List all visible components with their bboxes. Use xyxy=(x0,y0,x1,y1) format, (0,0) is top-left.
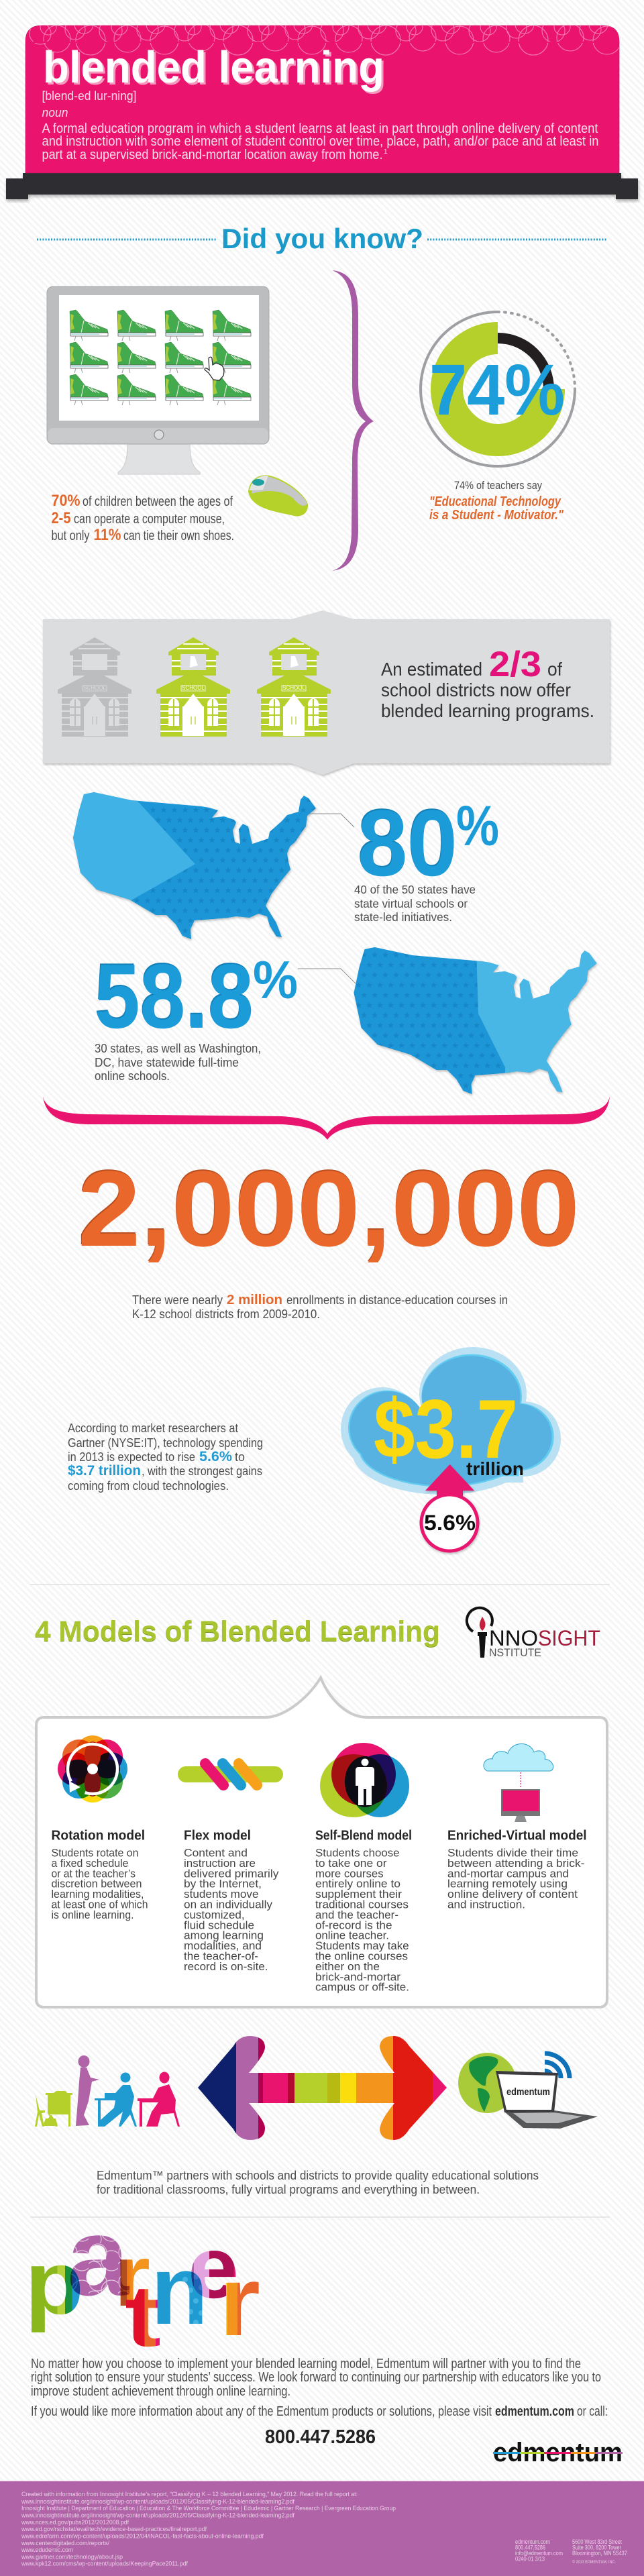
monitor screen xyxy=(59,295,259,421)
monitor body xyxy=(47,286,269,444)
title: blended learning xyxy=(45,44,386,95)
footer contact: 0240-01 3/13 xyxy=(515,2556,545,2563)
heading: partner lettering xyxy=(25,2195,260,2365)
text: Gartner spending: coming from cloud technologies. xyxy=(68,1479,229,1493)
text: 2 million enrollments: 2 million xyxy=(227,1293,282,1307)
text: 2 million enrollments xyxy=(132,1293,508,1321)
definition: and instruction with some element of student control over time, place, path, and/or pace and at least in xyxy=(42,134,598,149)
arrow and 5.6% badge xyxy=(421,1464,478,1551)
$3.7 value: $3.7 xyxy=(374,1383,518,1476)
rotation title: Rotation model xyxy=(51,1829,145,1843)
rotation description: discretion between xyxy=(51,1878,142,1890)
heading: partner lettering: p xyxy=(25,2233,84,2333)
icon: flex xyxy=(186,1764,275,1785)
icon: hand cursor xyxy=(205,357,224,380)
self-blend description: Students choose xyxy=(315,1847,400,1860)
cloud xyxy=(341,1347,561,1495)
self-blend description: brick-and-mortar xyxy=(315,1971,401,1983)
text: 2 million enrollments: K-12 school districts from 2009-2010. xyxy=(132,1307,320,1321)
stat: 58.8%: 58.8 xyxy=(94,944,253,1046)
footer address: Bloomington, MN 55437 xyxy=(572,2550,627,2557)
stat: 80%: % xyxy=(456,794,499,857)
model: rotation xyxy=(51,1735,148,1921)
header pink board xyxy=(25,25,619,173)
text: teachers quote: is a Student - Motivator." xyxy=(429,508,564,523)
text: 30 states: DC, have statewide full-time xyxy=(95,1055,239,1069)
heading: 4 Models of Blended Learning: 4 Models of Blended Learning xyxy=(35,1616,440,1648)
self-blend description xyxy=(315,1847,409,1994)
icon: computer mouse xyxy=(248,475,308,517)
model: self-blend xyxy=(315,1743,412,1994)
text: 70% of children xyxy=(51,492,234,544)
footer sources: www.innosightinstitute.org/innosight/wp-content/uploads/2012/05/Classifying-K-12-blended-learning2.pdf xyxy=(21,2512,294,2520)
text: closing paragraph: or call: xyxy=(577,2404,608,2419)
text: 70% of children: can operate a computer mouse, xyxy=(74,512,225,527)
text: Gartner spending: According to market researchers at xyxy=(68,1421,238,1435)
self-blend description: campus or off-site. xyxy=(315,1982,409,1994)
stat: 58.8%: % xyxy=(253,950,298,1010)
rotation description: a fixed schedule xyxy=(51,1858,129,1870)
self-blend description: the online courses xyxy=(315,1951,408,1963)
text: 70% of children: of children between the ages of xyxy=(83,494,233,509)
footer contact: info@edmentum.com xyxy=(515,2550,563,2557)
text: two thirds: An estimated xyxy=(381,659,482,680)
text: 70% of children: but only xyxy=(51,529,90,543)
text: 2 million enrollments: There were nearly xyxy=(132,1293,223,1307)
text: Gartner spending: in 2013 is expected to rise xyxy=(68,1450,195,1464)
definition: 1 xyxy=(384,148,388,156)
stat: 2,000,000: 2,000,000 xyxy=(78,1148,580,1269)
footer sources: www.edudemic.com xyxy=(21,2546,73,2554)
footer sources: www.nces.ed.gov/pubs2012/2012008.pdf xyxy=(21,2519,129,2526)
footer panel xyxy=(0,2481,644,2576)
stat: 58.8%: 58.8 xyxy=(95,945,254,1047)
text: 70% of children: 11% xyxy=(94,526,121,544)
icon: cloud and screen xyxy=(484,1743,553,1822)
flex description: Content and xyxy=(184,1847,248,1860)
header panel: blended learning definition xyxy=(6,15,638,199)
definition xyxy=(42,121,598,162)
footer address: Suite 300, 8200 Tower xyxy=(572,2544,622,2552)
text: 30 states: online schools. xyxy=(95,1069,170,1083)
connector line xyxy=(310,814,354,827)
flex description: on an individually xyxy=(184,1898,273,1911)
text: teachers quote: "Educational Technology xyxy=(429,494,561,509)
title: blended learning xyxy=(43,42,384,93)
footer sources: www.centerdigitaled.com/reports/ xyxy=(21,2540,109,2547)
stat: 2,000,000: 2,000,000 xyxy=(77,1147,580,1267)
text: Gartner spending: Gartner (NYSE:IT), technology spending xyxy=(68,1436,263,1450)
stat: 80%: 80 xyxy=(358,790,458,896)
icon: cloud with $3.7 trillion xyxy=(341,1347,561,1551)
text: 40 of 50 states xyxy=(354,883,476,924)
flex description: instruction are xyxy=(184,1858,256,1870)
footer address: 5600 West 83rd Street xyxy=(572,2538,622,2546)
heading: 4 Models of Blended Learning: 4 Models of Blended Learning xyxy=(35,1615,440,1648)
pink brace xyxy=(43,1096,610,1140)
flex description: modalities, and xyxy=(184,1940,262,1952)
text: 70% of children: can tie their own shoes. xyxy=(123,529,234,543)
map: 58.8% of states xyxy=(354,940,602,1101)
footer sources: www.edreform.com/wp-content/uploads/2012/04/iNACOL-fast-facts-about-online-learning.pdf xyxy=(21,2533,264,2540)
icon: globe and laptop xyxy=(458,2053,598,2129)
model: enriched-virtual xyxy=(447,1743,587,1911)
enriched-virtual description: online delivery of content xyxy=(447,1888,578,1900)
footer sources: www.gartner.com/technology/about.jsp xyxy=(21,2553,123,2561)
green segment xyxy=(431,322,565,456)
logo: Innosight Institute xyxy=(467,1608,600,1659)
text: two thirds: blended learning programs. xyxy=(381,700,594,721)
self-blend description: traditional courses xyxy=(315,1898,409,1911)
text: closing paragraph: improve student achievement through online learning. xyxy=(31,2384,290,2399)
footer sources: Created with information from Innosight Institute’s report, “Classifying K – 12 blended Learning,” May 2012. Read the full report at: xyxy=(21,2491,358,2498)
enriched-virtual description: Students divide their time xyxy=(447,1847,578,1860)
text: two thirds xyxy=(381,645,594,721)
self-blend description: and the teacher- xyxy=(315,1909,398,1921)
text: Edmentum partners xyxy=(97,2169,539,2196)
icon: green school 2: SCHOOL xyxy=(282,685,305,691)
self-blend description: to take one or xyxy=(315,1858,387,1870)
text: 40 of 50 states: 40 of the 50 states have xyxy=(354,883,476,896)
text: closing paragraph: If you would like more information about any of the Edmentum products or solutions, please visit xyxy=(31,2404,492,2419)
flex title: Flex model xyxy=(184,1829,251,1843)
text: closing paragraph xyxy=(31,2357,608,2419)
rotation description: at least one of which xyxy=(51,1898,148,1911)
self-blend description: Students may take xyxy=(315,1940,409,1952)
flex description: fluid schedule xyxy=(184,1919,254,1931)
trillion label: trillion xyxy=(466,1458,524,1479)
text: 30 states: 30 states, as well as Washington, xyxy=(95,1041,261,1055)
icon: green school 1 xyxy=(156,637,230,737)
header scribble pattern xyxy=(25,25,619,55)
self-blend description: supplement their xyxy=(315,1888,402,1900)
purple brace xyxy=(332,270,374,571)
icon: computer monitor with shoes xyxy=(47,286,269,474)
heading: partner lettering: n xyxy=(151,2235,208,2345)
header dark shelf xyxy=(6,173,638,199)
phone number: 800.447.5286 xyxy=(265,2426,376,2448)
enriched-virtual description: and-mortar campus and xyxy=(447,1868,569,1880)
icon: wifi xyxy=(545,2053,570,2078)
part of speech: noun xyxy=(42,106,68,119)
stat: 80%: 80 xyxy=(357,789,457,894)
blue student xyxy=(95,2073,137,2127)
self-blend description: of-record is the xyxy=(315,1919,392,1931)
logo: edmentum: edmentum xyxy=(493,2438,623,2467)
enriched-virtual description xyxy=(447,1847,585,1911)
text: teachers quote xyxy=(429,479,564,523)
text: two thirds: 2/3 xyxy=(489,645,541,684)
self-blend description: entirely online to xyxy=(315,1878,400,1890)
text: 40 of 50 states: state virtual schools or xyxy=(354,897,468,910)
heading: partner lettering: t xyxy=(125,2267,161,2365)
self-blend description: online teacher. xyxy=(315,1930,389,1942)
chart: 74% donut xyxy=(421,312,575,466)
heading: partner lettering: e xyxy=(188,2218,239,2316)
model: flex xyxy=(184,1764,279,1973)
rotation description: or at the teacher’s xyxy=(51,1868,136,1880)
text: Gartner spending: 5.6% xyxy=(199,1449,232,1464)
flex description: delivered primarily xyxy=(184,1868,279,1880)
flex description xyxy=(184,1847,279,1973)
text: Gartner spending: , with the strongest gains xyxy=(142,1464,262,1478)
shoes grid xyxy=(70,310,251,405)
text: 70% of children: 70% xyxy=(51,492,80,510)
logo: Innosight Institute: NNO xyxy=(489,1626,538,1650)
arrow: two-headed striped xyxy=(198,2033,447,2143)
text: 70% of children: 2-5 xyxy=(51,509,71,527)
text: Edmentum partners: for traditional classrooms, fully virtual programs and everything in between. xyxy=(97,2183,480,2196)
text: 30 states xyxy=(95,1041,261,1083)
rotation description xyxy=(51,1847,148,1921)
heading: partner lettering: r xyxy=(114,2226,150,2324)
footer contact: 800.447.5286 xyxy=(515,2544,545,2552)
flex description: by the Internet, xyxy=(184,1878,262,1890)
flex description: students move xyxy=(184,1888,259,1900)
footer contact: edmentum.com xyxy=(515,2538,550,2546)
monitor stand xyxy=(118,444,200,474)
heading: Did you know?: Did you know? xyxy=(221,223,423,254)
laptop xyxy=(496,2071,598,2129)
rotation description: Students rotate on xyxy=(51,1847,138,1860)
black segment xyxy=(498,333,554,389)
icon: rotation xyxy=(58,1735,127,1803)
self-blend description: more courses xyxy=(315,1868,384,1880)
rotation description: is online learning. xyxy=(51,1909,134,1921)
icon: self-blend xyxy=(320,1743,409,1817)
enriched-virtual title: Enriched-Virtual model xyxy=(447,1829,587,1843)
laptop: edmentum xyxy=(506,2087,550,2098)
text: Gartner spending: $3.7 trillion xyxy=(68,1463,141,1479)
flex description: the teacher-of- xyxy=(184,1951,258,1963)
heading: partner lettering: a xyxy=(67,2195,129,2318)
footer sources: www.kpk12.com/cms/wp-content/uploads/KeepingPace2011.pdf xyxy=(21,2560,188,2568)
arrow and 5.6% badge: 5.6% xyxy=(424,1511,476,1535)
text: Gartner spending xyxy=(68,1421,263,1493)
outer ring xyxy=(421,312,575,466)
enriched-virtual description: learning remotely using xyxy=(447,1878,568,1890)
footer sources: Innosight Institute | Department of Education | Education & The Workforce Committee | Edudemic | Gartner Research | Evergreen Education Group xyxy=(21,2505,396,2512)
icon: classroom silhouettes xyxy=(35,2055,180,2127)
connector line xyxy=(298,969,356,983)
footer contact xyxy=(515,2538,563,2563)
definition: A formal education program in which a student learns at least in part through online delivery of content xyxy=(42,121,598,136)
panel: school districts xyxy=(43,610,610,775)
text: 40 of 50 states: state-led initiatives. xyxy=(354,910,452,924)
definition: part at a supervised brick-and-mortar location away from home. xyxy=(42,148,382,162)
text: 2 million enrollments: enrollments in distance-education courses in xyxy=(286,1293,508,1307)
flex description: among learning xyxy=(184,1930,264,1942)
green desk and chair xyxy=(35,2091,72,2127)
text: two thirds: school districts now offer xyxy=(381,680,571,700)
footer address: © 2013 EDMENTUM, INC. xyxy=(572,2560,616,2565)
flex description: record is on-site. xyxy=(184,1961,268,1973)
logo: Innosight Institute: NSTITUTE xyxy=(489,1646,541,1659)
pronunciation: [blend-ed lur-ning] xyxy=(42,89,137,103)
panel: four models xyxy=(36,1678,607,2007)
purple teacher xyxy=(76,2055,99,2126)
enriched-virtual description: between attending a brick- xyxy=(447,1858,585,1870)
icon: green school 2 xyxy=(257,637,331,737)
icon: green school 1: SCHOOL xyxy=(182,685,205,691)
icon: gray school: SCHOOL xyxy=(83,685,106,691)
enriched-virtual description: and instruction. xyxy=(447,1898,525,1911)
74% value: 74% xyxy=(429,349,565,430)
map: 80% of states xyxy=(67,785,316,939)
self-blend title: Self-Blend model xyxy=(315,1829,412,1843)
text: closing paragraph: edmentum.com xyxy=(495,2404,574,2419)
rotation description: learning modalities, xyxy=(51,1888,144,1900)
self-blend description: either on the xyxy=(315,1961,380,1973)
icon: gray school xyxy=(58,637,131,737)
pink student xyxy=(138,2072,180,2127)
text: teachers quote: 74% of teachers say xyxy=(454,479,542,492)
footer sources: www.innosightinstitute.org/innosight/wp-content/uploads/2012/05/Classifying-K-12-blended-learning2.pdf xyxy=(21,2498,294,2506)
text: two thirds: of xyxy=(547,659,562,680)
logo: Innosight Institute: SIGHT xyxy=(538,1626,600,1650)
footer address xyxy=(572,2538,627,2565)
footer sources: www.ed.gov/rschstat/eval/tech/evidence-based-practices/finalreport.pdf xyxy=(21,2526,207,2533)
heading: partner lettering: r xyxy=(219,2246,260,2357)
text: Edmentum partners: Edmentum™ partners with schools and districts to provide quality educational solutions xyxy=(97,2169,539,2182)
footer sources xyxy=(21,2491,396,2568)
flex description: customized, xyxy=(184,1909,245,1921)
text: Gartner spending: to xyxy=(235,1450,245,1464)
globe xyxy=(458,2053,517,2113)
